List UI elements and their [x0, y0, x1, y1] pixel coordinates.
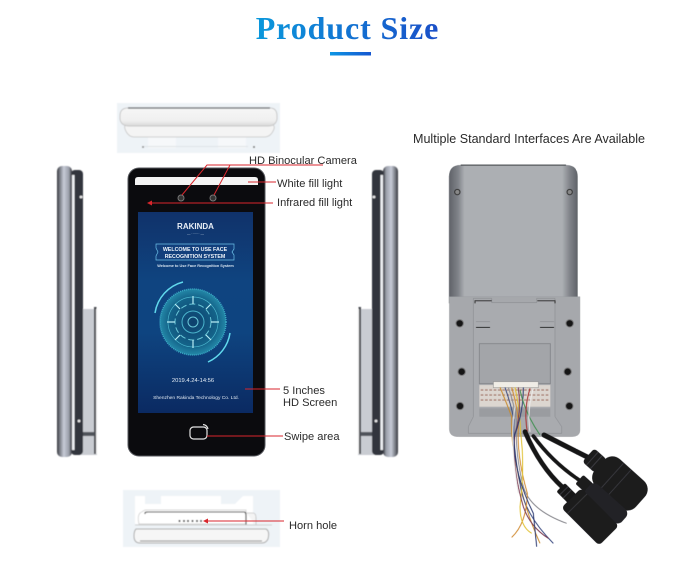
label: Horn hole: Horn hole — [289, 520, 337, 532]
device body — [128, 168, 265, 456]
rear housing — [71, 170, 83, 455]
screen logo sub-line: — ······· — — [187, 232, 205, 236]
back cover — [449, 165, 578, 303]
title: Product Size — [256, 10, 439, 46]
large round connector — [576, 442, 652, 515]
screen welcome caption: Welcome to Use Face Recognition System — [157, 264, 234, 268]
panel: left side view of device — [57, 166, 97, 457]
screen face dial — [155, 282, 230, 362]
callout lines — [148, 165, 323, 521]
screen welcome box: WELCOME TO USE FACE — [163, 247, 228, 253]
terminal area — [479, 385, 550, 407]
RJ45 connector — [551, 477, 619, 546]
screen welcome box — [156, 244, 234, 260]
heading: interfaces: Multiple Standard Interfaces Are Available — [413, 132, 645, 146]
camera lenses — [178, 195, 216, 201]
screen date: 2019.4.24-14:56 — [172, 378, 214, 384]
black cables — [525, 432, 590, 487]
label: 5 Inches HD Screen: HD Screen — [283, 397, 337, 409]
panel: bottom view of device — [123, 490, 280, 547]
label: Infrared fill light: Infrared fill light — [277, 197, 352, 209]
icon: swipe area — [190, 424, 208, 439]
white fill light bar — [135, 177, 258, 185]
DC connector — [574, 473, 630, 526]
mounting holes — [456, 320, 573, 410]
screen welcome box: RECOGNITION SYSTEM — [165, 254, 226, 260]
screen logo: RAKINDA — [177, 222, 214, 231]
panel: front view of device — [128, 168, 265, 456]
label: Swipe area: Swipe area — [284, 431, 340, 443]
front housing — [57, 166, 72, 457]
label: HD Binocular Camera: HD Binocular Camera — [249, 155, 358, 167]
panel: back view of device with cables — [449, 165, 652, 547]
mounting bracket — [449, 297, 580, 437]
panel: right side view of device — [358, 166, 398, 457]
label: White fill light: White fill light — [277, 178, 342, 190]
screen company name: Shenzhen Rakinda Technology Co. Ltd. — [153, 395, 239, 401]
label: 5 Inches HD Screen: 5 Inches — [283, 385, 325, 397]
screen — [138, 212, 253, 413]
bracket — [81, 309, 97, 455]
callout arrowheads — [147, 200, 208, 524]
title underline — [330, 52, 371, 56]
colored wires — [500, 387, 567, 547]
panel: top view of device — [117, 103, 280, 153]
